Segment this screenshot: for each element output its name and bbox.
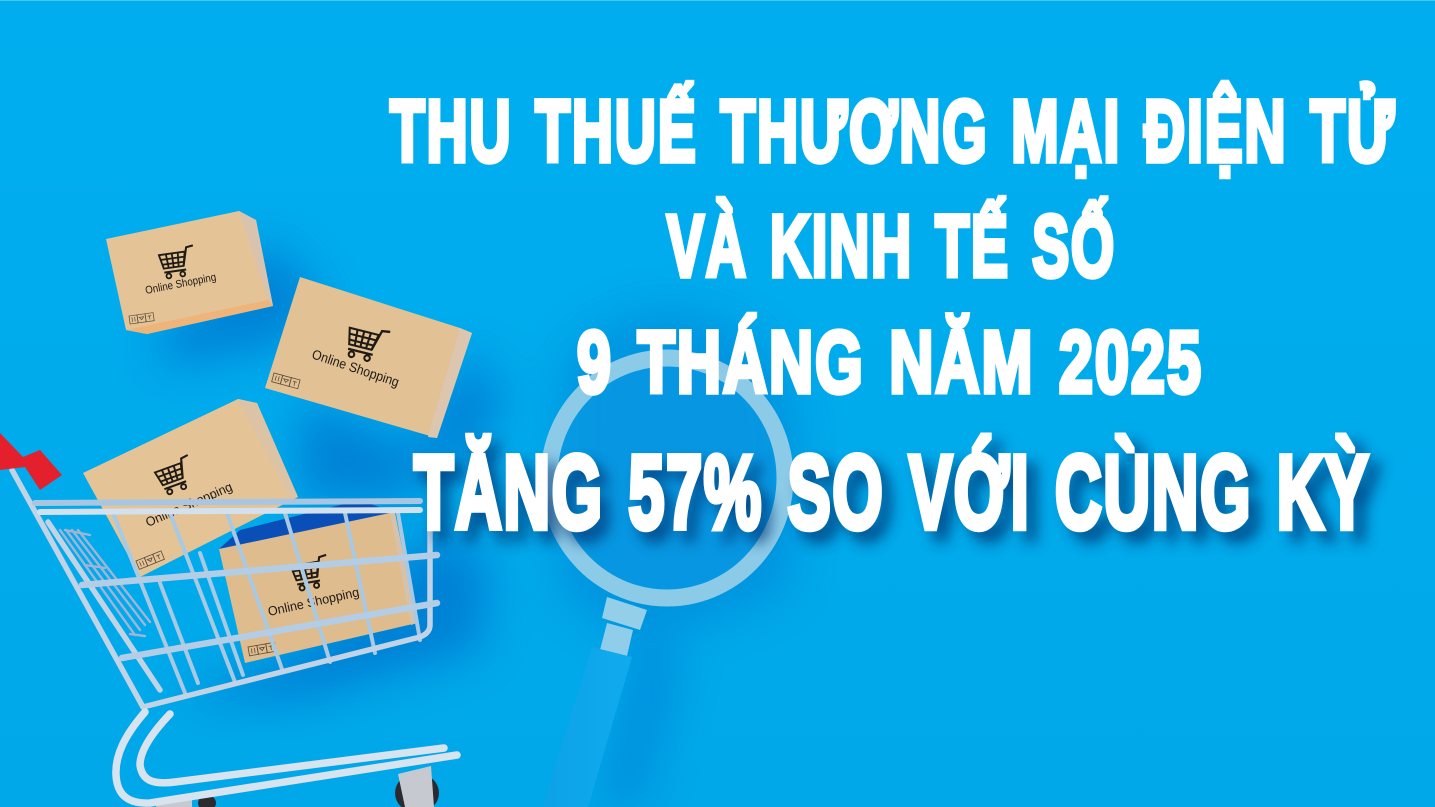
box: inside cart, front bbox=[219, 500, 417, 663]
handle collar bbox=[602, 597, 647, 630]
box: top-left: Online Shopping bbox=[144, 271, 217, 297]
lens inner tint bbox=[555, 364, 779, 592]
cart top rim bbox=[35, 501, 420, 512]
title bbox=[390, 83, 1396, 562]
cart left side wire panel bbox=[60, 530, 150, 636]
cart verticals bbox=[113, 513, 420, 693]
box: inside cart, back bbox=[83, 399, 298, 577]
title line 2: VÀ KINH TẾ SỐ bbox=[667, 198, 1116, 295]
box: inside cart, back: Online Shopping bbox=[143, 479, 234, 530]
cart wheels bbox=[156, 766, 439, 807]
box: middle-right: Online Shopping bbox=[310, 347, 401, 390]
cart rails bbox=[82, 555, 437, 658]
cart red handle bbox=[0, 433, 62, 490]
magnifying glass bbox=[543, 358, 785, 807]
handle neck bbox=[600, 623, 633, 656]
box: top-left bbox=[106, 211, 273, 334]
box: middle-right bbox=[265, 277, 472, 438]
box: inside cart, front: Online Shopping bbox=[266, 584, 360, 619]
cart base bbox=[116, 712, 457, 803]
cart frame bbox=[12, 470, 430, 707]
lens ring bbox=[549, 358, 785, 598]
handle grip bbox=[543, 647, 632, 807]
shopping cart bbox=[0, 433, 457, 807]
